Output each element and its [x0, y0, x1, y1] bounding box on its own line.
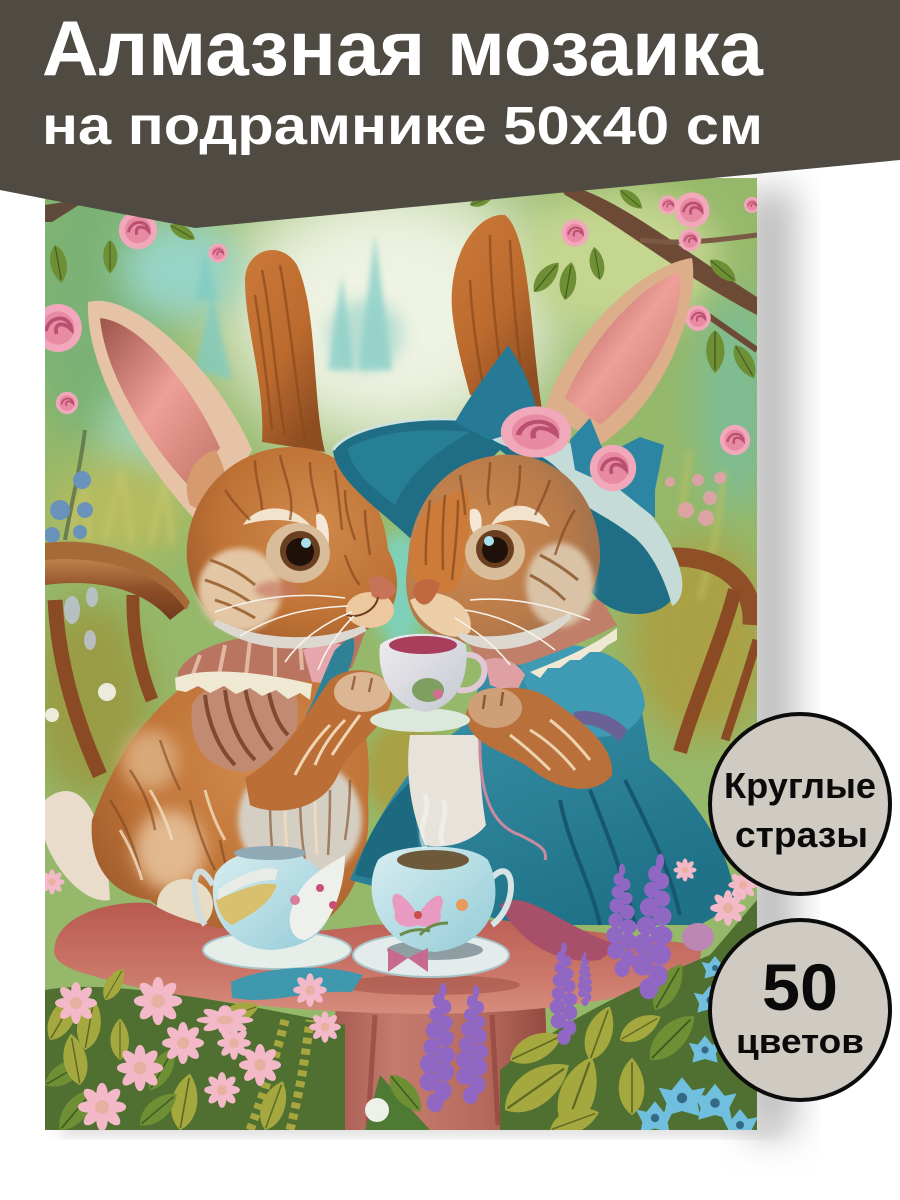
- teacup held by rabbits: [370, 634, 484, 732]
- right rabbit: whiskers: [455, 599, 590, 665]
- left rabbit: puff sleeve and collar: [175, 631, 365, 772]
- badge: 50 colours: [710, 920, 890, 1100]
- right rabbit: arm and paw: [466, 688, 612, 789]
- right rabbit: pink ear: [545, 258, 693, 445]
- painting: rabbits tea party: [20, 160, 775, 1141]
- left rabbit: nose: [368, 576, 396, 599]
- left rabbit: head: [187, 447, 397, 670]
- badge: 50 colours: цветов: [736, 1023, 864, 1061]
- left rabbit: back ear: [245, 250, 325, 452]
- left wildflowers: [44, 430, 116, 722]
- sugar bowl with saucer: [353, 795, 511, 977]
- right rabbit: [333, 215, 735, 925]
- lavender spikes: [417, 852, 680, 1113]
- right rabbit: eye: [476, 530, 514, 568]
- right rabbit: dress: [350, 597, 735, 925]
- left rabbit: tail: [45, 791, 110, 900]
- teapot with saucer: [195, 846, 351, 969]
- badge: round rhinestones: Круглые: [724, 765, 876, 806]
- right rabbit: back ear: [452, 215, 542, 410]
- left rabbit: whiskers: [215, 595, 354, 670]
- tree branch and blossoms: [34, 182, 761, 526]
- table with cloth: [54, 900, 701, 1130]
- header banner: [0, 0, 900, 228]
- blue flowers: [636, 956, 758, 1139]
- left rabbit: body: [92, 680, 369, 928]
- subtitle: на подрамнике 50х40 см: [42, 96, 763, 156]
- right rabbit: nose: [413, 579, 440, 605]
- badge: round rhinestones: стразы: [735, 814, 868, 855]
- bottom foliage and flowers: [39, 852, 758, 1141]
- badge: 50 colours: 50: [762, 950, 838, 1024]
- left rabbit: [45, 250, 397, 938]
- canvas shadow: [60, 190, 795, 1135]
- napkin: [231, 968, 363, 1000]
- painted background: [20, 160, 775, 820]
- left rabbit: arm and paw: [245, 670, 392, 811]
- left rabbit: pink ear: [88, 301, 252, 530]
- right rabbit: head: [406, 455, 600, 665]
- badge: round rhinestones: [710, 714, 890, 894]
- left rabbit: eye: [280, 531, 320, 571]
- right rabbit: hat: [333, 345, 682, 614]
- chairs: [45, 542, 757, 775]
- title: Алмазная мозаика: [42, 4, 764, 92]
